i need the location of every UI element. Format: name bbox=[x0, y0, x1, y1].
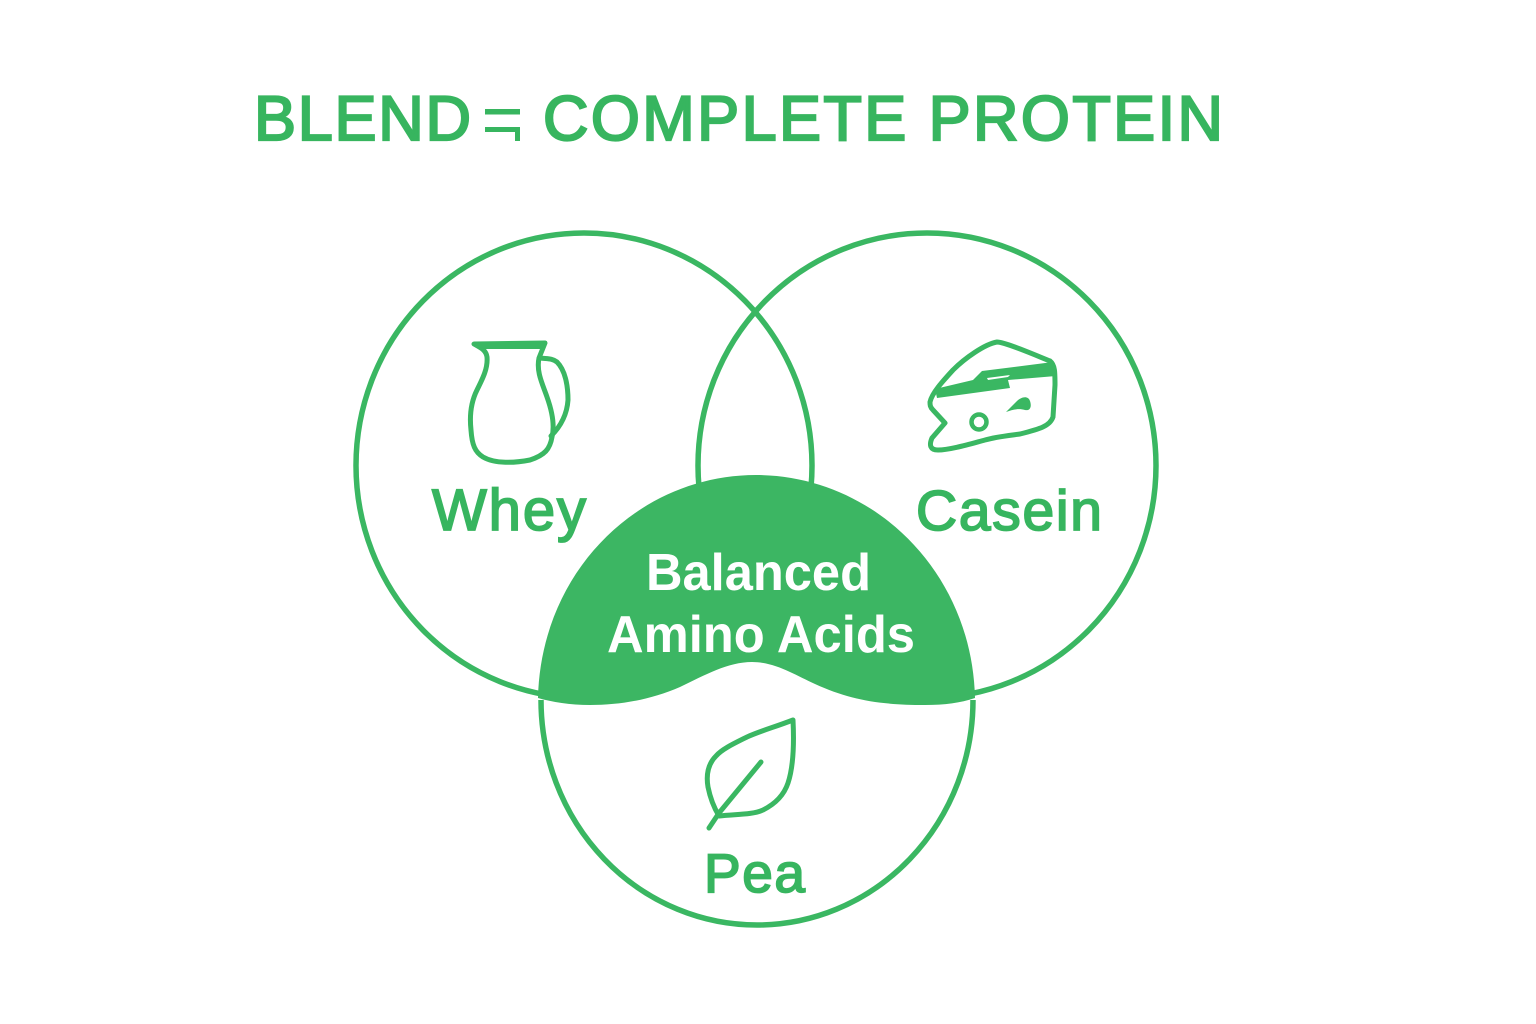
icon: leaf bbox=[707, 720, 793, 828]
center overlap: balanced amino acids bbox=[538, 475, 975, 705]
title: COMPLETE PROTEIN bbox=[543, 84, 1223, 154]
center text: Balanced bbox=[646, 544, 871, 602]
jug lip bbox=[473, 341, 547, 349]
venn diagram bbox=[356, 233, 1156, 925]
label: whey: Whey bbox=[432, 478, 586, 543]
icon: broken equals sign bbox=[485, 109, 520, 141]
label: casein: Casein bbox=[916, 479, 1102, 543]
cheese hole bbox=[972, 414, 986, 430]
circle: pea bbox=[541, 700, 973, 925]
label: pea: Pea bbox=[704, 842, 805, 904]
center text: Amino Acids bbox=[607, 606, 915, 664]
icon: cheese wedge bbox=[930, 342, 1056, 450]
icon: milk jug bbox=[470, 341, 568, 462]
cheese band bbox=[935, 362, 1056, 398]
circle: casein bbox=[698, 233, 1156, 698]
circle: whey bbox=[356, 233, 812, 698]
title: BLEND bbox=[254, 84, 471, 154]
jug handle bbox=[540, 358, 568, 436]
center text bbox=[607, 544, 915, 664]
cheese tear hole bbox=[1006, 397, 1031, 412]
cheese band highlight bbox=[987, 375, 1010, 380]
